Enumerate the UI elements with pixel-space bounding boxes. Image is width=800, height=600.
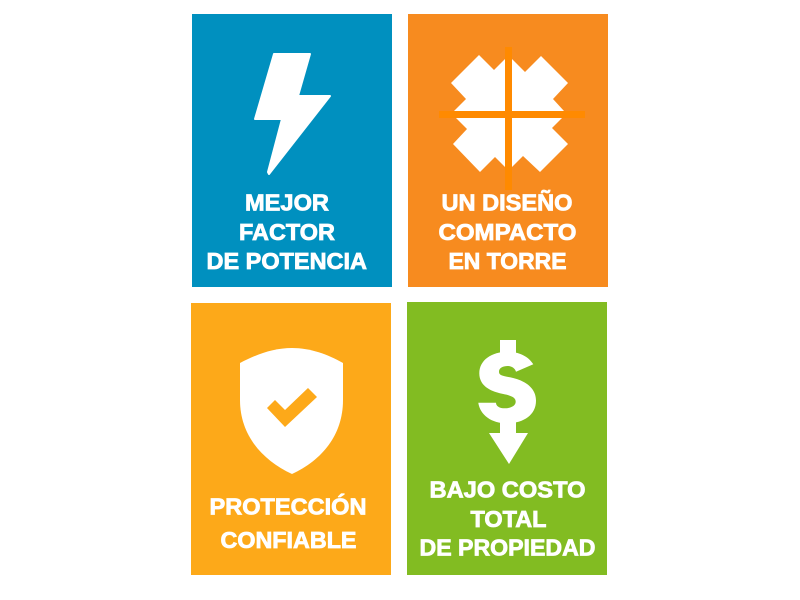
heading: bajo costo total de propiedad: DE PROPIEDAD <box>420 534 596 560</box>
heading: un diseño compacto en torre: EN TORRE <box>448 248 566 274</box>
icon: dollar sign with down arrow <box>478 340 536 464</box>
icon: shield with check mark <box>240 348 343 474</box>
heading: bajo costo total de propiedad: BAJO COSTO <box>430 476 586 502</box>
heading: protección confiable: PROTECCIÓN <box>210 492 366 520</box>
panel: protección confiable <box>191 303 391 575</box>
panel: mejor factor de potencia <box>192 14 392 287</box>
heading: un diseño compacto en torre: COMPACTO <box>438 219 576 245</box>
heading: bajo costo total de propiedad: TOTAL <box>470 506 546 532</box>
heading: mejor factor de potencia: DE POTENCIA <box>206 248 367 274</box>
panel: bajo costo total de propiedad <box>407 302 607 575</box>
icon: lightning bolt <box>255 54 330 174</box>
heading: protección confiable <box>210 492 366 553</box>
panel: un diseño compacto en torre <box>408 14 608 287</box>
icon: compact tower cross <box>439 47 585 190</box>
heading: mejor factor de potencia: MEJOR <box>245 190 329 216</box>
heading: protección confiable: CONFIABLE <box>220 527 356 553</box>
heading: mejor factor de potencia <box>206 190 367 274</box>
heading: un diseño compacto en torre <box>438 188 576 274</box>
heading: mejor factor de potencia: FACTOR <box>239 219 335 245</box>
heading: bajo costo total de propiedad <box>420 476 596 560</box>
heading: un diseño compacto en torre: UN DISEÑO <box>442 188 572 216</box>
